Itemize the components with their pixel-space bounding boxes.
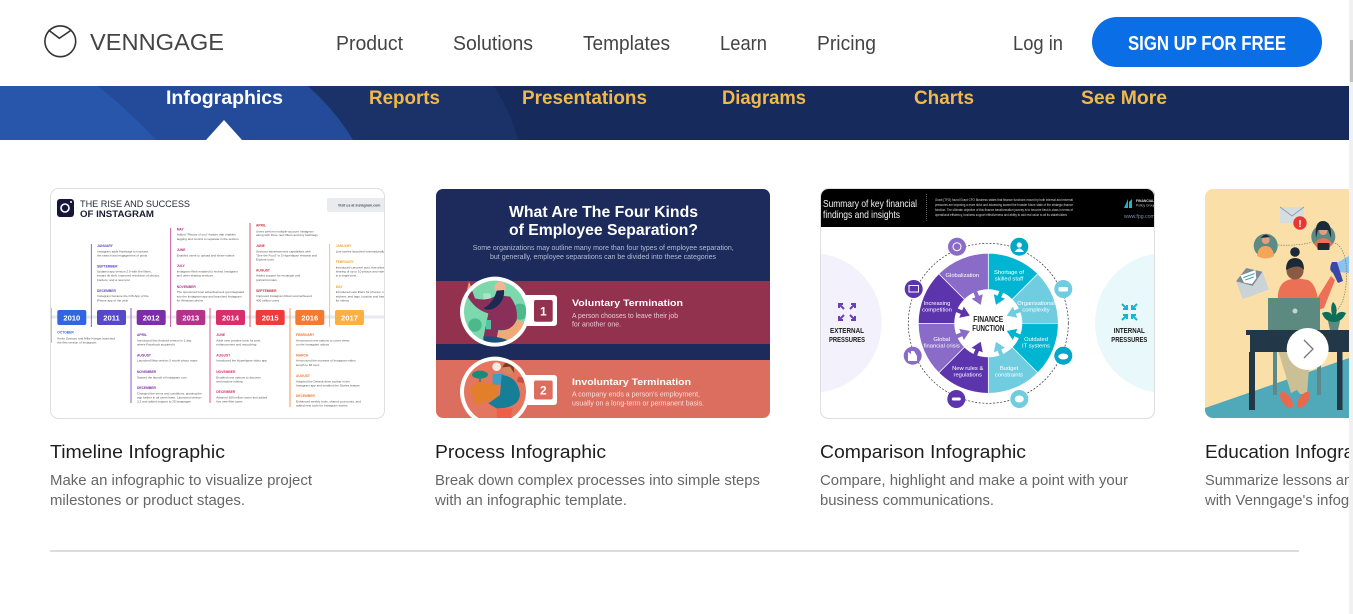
caption: comparison: Compare, highlight and make a point with your [820, 473, 1128, 489]
tab labels: Presentations [522, 87, 647, 109]
process title [509, 204, 698, 239]
navigation links: Pricing [817, 33, 876, 55]
2015 events: Explore tools [256, 258, 274, 262]
caption: comparison: Comparison Infographic [820, 442, 1026, 462]
internal pressures side [1095, 254, 1154, 392]
2011 events: the search and engagement of posts [97, 253, 148, 257]
process title: What Are The Four Kinds [509, 204, 698, 221]
tab labels [166, 87, 1167, 109]
2015 events: "See the Food" in 5 Hyperlapse rewards and [256, 253, 317, 257]
internal pressures side: PRESSURES [1111, 335, 1147, 344]
2014 events: and explore editing [216, 380, 243, 384]
navigation links: Learn [720, 33, 767, 55]
2012 events: APRIL [137, 333, 147, 337]
process subtitle [473, 244, 734, 260]
black header strip: FINANCIAL [1136, 199, 1154, 203]
2012 events: DECEMBER [137, 386, 156, 390]
2011 events: iPhone app of the year [97, 298, 128, 302]
2015 events: AUGUST [256, 268, 270, 272]
2014 events: five new filter types [216, 400, 243, 404]
year markers: 2016 [301, 313, 318, 322]
wheel labels: competition [922, 308, 952, 314]
voluntary text: for another one. [572, 320, 621, 328]
icon: mail with alert [1280, 207, 1307, 230]
wheel labels: Outdated [1024, 337, 1048, 343]
2011 events: Updated app version 2.0 with live filters, [97, 270, 152, 274]
ring icons [904, 238, 1072, 408]
illustration: person waving [460, 277, 530, 347]
caption: comparison [820, 442, 1128, 509]
active tab pointer [206, 120, 242, 140]
category tab band [0, 86, 1349, 140]
card border: timeline [50, 188, 384, 418]
card: timeline infographic thumbnail [51, 198, 384, 407]
2014 events: DECEMBER [216, 390, 236, 394]
2013 events: Added "Photos of you" feature that enables [177, 233, 236, 237]
wheel labels: financial crisis [924, 344, 960, 350]
black header strip: Summary of key financial [823, 198, 917, 210]
tab labels: Reports [369, 87, 440, 109]
2017 events: sharing of up to 10 photos and videos [336, 270, 388, 274]
timeline title: OF INSTAGRAM [80, 208, 154, 219]
2013 events: Instagram Web enabled to embed Instagram [177, 270, 238, 274]
2013 events: and other sharing services [177, 274, 213, 278]
2011 events: Instagram became the iOS App of the [97, 294, 149, 298]
2010 events: OCTOBER [57, 330, 74, 334]
visit button: Visit us at instagram.com [338, 204, 380, 208]
year markers: 2012 [143, 313, 160, 322]
voluntary text: Voluntary Termination [572, 298, 683, 309]
timeline track [50, 316, 385, 318]
visit button [327, 198, 387, 212]
timeline title [80, 200, 190, 217]
2012 events: Introduced first Android version in 1 day [137, 338, 192, 342]
2011 events: Instagram adds Hashtags to increase [97, 249, 149, 253]
black header strip: pressures are imposing a more strict and advancing toward the broader future state of the strategic finance [935, 203, 1073, 207]
2015 events: along with three new filters and tiny hashtags [256, 233, 318, 237]
2015 events: Users perform multiple-account Instagram [256, 230, 314, 234]
potted plant [1322, 302, 1346, 330]
2016 events: AUGUST [296, 374, 310, 378]
2015 events: Sections advertisement capabilities with [256, 249, 311, 253]
external pressures side: EXTERNAL [830, 326, 864, 335]
2015 events: portrait formats [256, 278, 277, 282]
2017 events: Introduced new filters for phones, new [336, 290, 389, 294]
header bar [45, 17, 1322, 67]
2013 events: tagging and control to separate in the section [177, 237, 239, 241]
2013 events: The sponsored post advertisement got integrated [177, 290, 244, 294]
tab labels: Infographics [166, 87, 283, 109]
2016 events: FEBRUARY [296, 333, 315, 337]
2016 events: added new tools for Instagram stories [296, 404, 348, 408]
megaphone [1330, 256, 1349, 283]
year markers: 2013 [182, 313, 199, 322]
wheel labels: regulations [954, 372, 982, 378]
wheel labels: Shortage of [994, 270, 1024, 276]
avatar: woman with laptop [1311, 221, 1335, 250]
caption: process [434, 442, 760, 509]
tab labels: Charts [914, 87, 974, 109]
2014 events: AUGUST [216, 354, 230, 358]
wheel labels: constraints [995, 372, 1023, 378]
wheel labels: Global [933, 337, 950, 343]
logo: VENNGAGE [90, 29, 224, 55]
2015 events: APRIL [256, 224, 266, 228]
black header strip: findings and insights [823, 209, 900, 221]
2013 events [177, 228, 244, 302]
2013 events: into the Instagram app and launched Instagram [177, 294, 242, 298]
2017 events: FEBRUARY [336, 260, 355, 264]
inward arrows [956, 291, 1020, 356]
2014 events: Adds new creative tools for post [216, 338, 260, 342]
caption: process: Break down complex processes into simple steps [435, 473, 760, 489]
number badge 1: 1 [540, 304, 547, 318]
2016 events: DECEMBER [296, 394, 315, 398]
2015 events: 400 million users [256, 298, 280, 302]
2010 events: Kevin Systrom and Mike Krieger launched [57, 336, 115, 340]
logo [45, 26, 224, 57]
tab labels: See More [1081, 87, 1167, 109]
navigation links [336, 33, 1063, 55]
caption: process: with an infographic template. [434, 493, 627, 509]
2017 events: Introduced carousel post, that allows [336, 266, 386, 270]
caption: timeline: Timeline Infographic [50, 442, 225, 462]
2014 events: Attained 300 million users and added [216, 395, 267, 399]
2015 events: Improved Instagram Direct and achieved [256, 294, 312, 298]
2015 events: SEPTEMBER [256, 289, 277, 293]
finance function label [972, 316, 1004, 331]
desk [1246, 330, 1349, 410]
wheel labels: complexity [1022, 308, 1050, 314]
wheel labels: Organisational [1017, 301, 1055, 307]
2017 events: stickers, and tags, location and hashtags [336, 294, 392, 298]
2011 events: DECEMBER [97, 289, 116, 293]
involuntary text: A company ends a person's employment, [572, 390, 700, 398]
finance wheel chart [918, 253, 1058, 393]
navigation links: Solutions [453, 33, 533, 55]
2013 events: Enabled users to upload and share videos [177, 253, 235, 257]
2013 events: for Windows phone [177, 298, 203, 302]
caption: timeline: milestones or product stages. [50, 493, 245, 509]
2016 events: Announced new options to count views [296, 338, 350, 342]
2013 events: JUNE [177, 248, 186, 252]
wheel labels: New rules & [952, 366, 983, 372]
number badge 2 [522, 375, 557, 405]
2017 events: MAY [336, 285, 344, 289]
navigation links: Templates [583, 33, 670, 55]
involuntary text: usually on a long-term or permanent basis. [572, 398, 704, 408]
voluntary text [572, 300, 682, 326]
external pressures side: PRESSURES [829, 335, 865, 344]
2013 events: NOVEMBER [177, 285, 196, 289]
black header strip: Grant (TFG) found Grant CFO Business states that finance functions mount by both internal and external [935, 198, 1073, 202]
wheel labels: Budget [1000, 366, 1019, 372]
wheel labels: IT systems [1022, 344, 1050, 350]
illustration: person carrying box [460, 356, 528, 418]
2012 events: where Facebook acquired it [137, 342, 175, 346]
2010 events: the first version of Instagram [57, 340, 97, 344]
woman torso and head [1278, 247, 1335, 310]
wheel labels: Globalization [946, 273, 979, 279]
year markers: 2011 [103, 313, 121, 322]
laptop [1268, 298, 1320, 330]
external pressures side [821, 254, 882, 392]
2014 events [216, 333, 267, 404]
number badge 2: 2 [540, 384, 547, 398]
2015 events: JUNE [256, 244, 266, 248]
year markers: 2010 [63, 313, 80, 322]
tab labels: Diagrams [722, 87, 806, 109]
2011 events: JANUARY [97, 244, 114, 248]
2016 events: MARCH [296, 354, 309, 358]
2015 events [256, 224, 318, 302]
year markers: 2017 [341, 313, 358, 322]
2011 events [97, 244, 160, 302]
2017 events: Live stories launched internationally [336, 249, 385, 253]
wheel labels: Increasing [924, 301, 950, 307]
year markers: 2014 [222, 313, 240, 322]
navigation links: Product [336, 33, 403, 55]
finance function label: FUNCTION [972, 324, 1004, 333]
2017 events: JANUARY [336, 244, 352, 248]
2015 events: Added support for rectangle and [256, 274, 300, 278]
black header strip: Policy Group [1136, 204, 1156, 208]
year markers [57, 310, 364, 325]
avatar: man [1254, 234, 1278, 258]
band: involuntary termination [436, 356, 770, 418]
2012 events: NOVEMBER [137, 370, 157, 374]
2014 events: enhancement and retouching [216, 342, 257, 346]
finance function label: FINANCE [973, 315, 1004, 324]
caption: timeline [50, 442, 312, 509]
dotted connector [1278, 242, 1347, 312]
2014 events: Introduced the Hyperlapse video app [216, 359, 267, 363]
2013 events: MAY [177, 228, 185, 232]
caption: education [1204, 442, 1353, 509]
2016 events: length to 60 secs [296, 363, 320, 367]
2016 events [296, 333, 361, 408]
voluntary text: A person chooses to leave their job [572, 311, 678, 320]
icon: mail with alert: ! [1298, 219, 1302, 230]
icon: open envelope [1233, 263, 1269, 299]
2016 events: on the Instagram videos [296, 342, 329, 346]
wheel labels [922, 270, 1055, 378]
process subtitle: Some organizations may outline many more than four types of employee separation, [473, 243, 734, 252]
woman's legs [1277, 350, 1325, 410]
navigation links: Log in [1013, 33, 1063, 55]
involuntary text [572, 377, 704, 408]
card: comparison infographic thumbnail [821, 189, 1155, 408]
process subtitle: but generally, employee separations can be divided into these categories [490, 252, 716, 261]
next arrow button [1287, 328, 1329, 370]
2013 events: JULY [177, 264, 186, 268]
sign up button: SIGN UP FOR FREE [1128, 33, 1286, 55]
2014 events: JUNE [216, 333, 226, 337]
scrollbar [1349, 0, 1353, 614]
2016 events: Announced the increase of Instagram video [296, 359, 356, 363]
caption: process: Process Infographic [435, 442, 606, 462]
2011 events: instant tilt shift, improved resolution of photos, [97, 274, 160, 278]
2016 events: Enhanced weekly tools, shared your posts, and [296, 400, 361, 404]
2017 events: in a single post [336, 274, 356, 278]
2011 events: borders, and a new icon [97, 278, 130, 282]
card: process infographic thumbnail [436, 189, 770, 427]
black header strip [821, 189, 1156, 227]
2017 events: for videos [336, 298, 350, 302]
year markers: 2015 [262, 313, 279, 322]
2012 events: AUGUST [137, 354, 151, 358]
2016 events: Instagram app and enabled the Stories feature [296, 384, 360, 388]
black header strip: function. The ultimate objective of this finance transformation journey is to become best-in-class in terms of [935, 208, 1073, 212]
number badge 1 [522, 295, 557, 326]
caption: timeline: Make an infographic to visualize project [50, 473, 312, 489]
band: voluntary termination [436, 277, 770, 347]
timeline title: THE RISE AND SUCCESS [80, 199, 190, 209]
wheel labels: skilled staff [995, 276, 1024, 282]
2014 events: NOVEMBER [216, 370, 236, 374]
process title: of Employee Separation? [509, 222, 698, 239]
card: education infographic thumbnail [1205, 189, 1349, 418]
sign up button [1092, 17, 1322, 67]
teal floor [1205, 358, 1349, 418]
2012 events: app further in all users base. Launched version [137, 395, 202, 399]
vertical year stems [51, 223, 330, 407]
2011 events: SEPTEMBER [97, 264, 118, 268]
card border: comparison [820, 188, 1154, 418]
chair [1273, 350, 1321, 395]
2012 events: 3.2 and added support to 25 languages [137, 400, 191, 404]
caption: comparison: business communications. [820, 493, 994, 509]
black header strip: www.fpg.com [1124, 214, 1155, 220]
2012 events [137, 333, 202, 404]
2016 events: Adopted the Default-drive toolbar in the [296, 379, 350, 383]
2017 events [336, 244, 384, 302]
2012 events: Launched Map version 3 month photo maps [137, 359, 198, 363]
dashed outer ring [908, 243, 1068, 403]
instagram logo [57, 199, 74, 217]
involuntary text: Involuntary Termination [572, 377, 691, 388]
2012 events: Started the launch of Instagram.com [137, 375, 187, 379]
black header strip: operational efficiency, business support effectiveness and ability to add real value to all its stakeholders [935, 213, 1067, 217]
2012 events: Changed the terms and conditions, growing the [137, 391, 202, 395]
2014 events: Enabled new options to discover [216, 375, 261, 379]
2010 events [57, 330, 115, 344]
internal pressures side: INTERNAL [1114, 326, 1145, 335]
